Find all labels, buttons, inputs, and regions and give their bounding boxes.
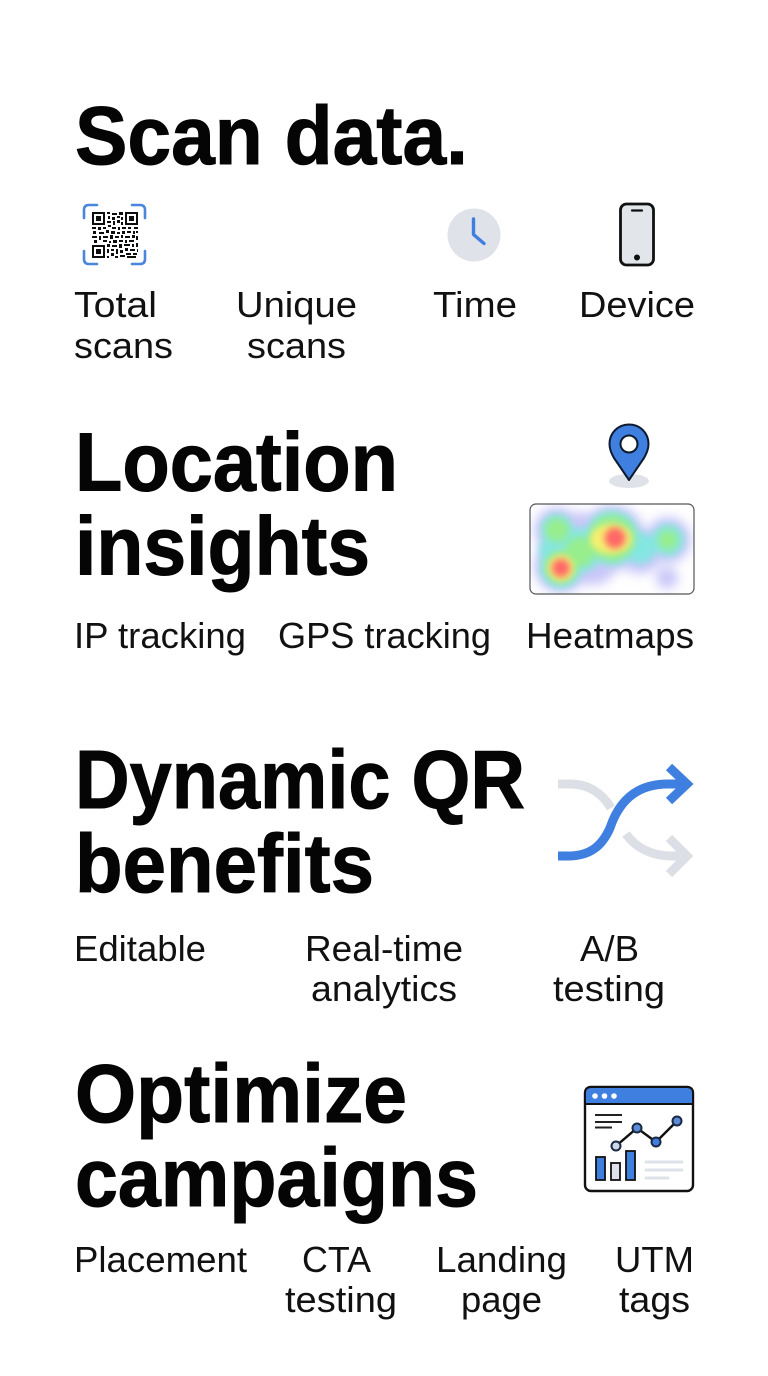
label: Total scans second line: scans — [74, 325, 173, 366]
heading: Dynamic QR benefits — [75, 733, 525, 910]
label: Unique scans second line: scans — [247, 325, 346, 366]
label: Unique scans: Unique — [236, 284, 357, 325]
label: testing: testing — [553, 968, 665, 1009]
label: analytics: analytics — [311, 968, 457, 1009]
icon: clock — [448, 208, 500, 262]
heatmap — [530, 504, 694, 594]
label: Editable: Editable — [74, 928, 206, 969]
label: tags: tags — [619, 1279, 690, 1320]
heading: Location insights: insights — [75, 500, 370, 592]
label: GPS tracking: GPS tracking — [278, 615, 491, 656]
heading: Optimize campaigns: Optimize — [75, 1047, 407, 1140]
heading: Dynamic QR benefits: Dynamic QR — [75, 733, 525, 826]
icon: QR code — [84, 205, 145, 264]
label: page: page — [461, 1279, 542, 1320]
label: IP tracking: IP tracking — [74, 615, 246, 656]
heading: Location insights — [75, 416, 398, 592]
label: Total scans: Total — [74, 284, 157, 325]
label: UTM: UTM — [615, 1239, 694, 1280]
icon: split arrows — [558, 767, 687, 874]
label: A/B: A/B — [580, 928, 639, 969]
label: CTA: CTA — [302, 1239, 372, 1280]
heading: Optimize campaigns — [75, 1047, 478, 1224]
label: Heatmaps: Heatmaps — [526, 615, 694, 656]
heading: Scan data: Scan data. — [75, 89, 468, 182]
label: Landing: Landing — [436, 1239, 567, 1280]
label: Placement: Placement — [74, 1239, 247, 1280]
icon: smartphone — [620, 204, 654, 265]
label: Time: Time — [433, 284, 517, 325]
label: Real-time: Real-time — [305, 928, 463, 969]
label: testing: testing — [285, 1279, 397, 1320]
heading: Location insights: Location — [75, 416, 398, 508]
icon: map pin — [609, 424, 649, 488]
label: Device: Device — [579, 284, 695, 325]
heading: Dynamic QR benefits: benefits — [75, 817, 374, 910]
heading: Optimize campaigns: campaigns — [75, 1131, 478, 1224]
icon: analytics dashboard — [585, 1087, 693, 1191]
